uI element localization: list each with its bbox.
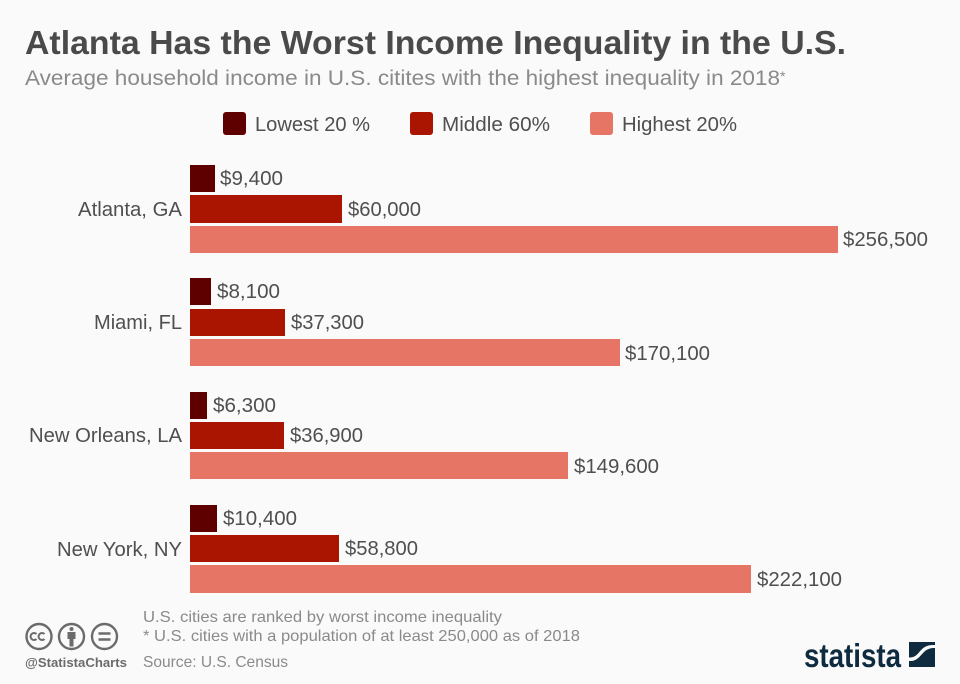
subtitle asterisk: * [780, 68, 786, 84]
group: Miami: $170,100 [625, 343, 710, 365]
group: Miami [94, 278, 710, 366]
group: New Orleans: $149,600 [574, 456, 659, 478]
footnotes: * U.S. cities with a population of at least 250,000 as of 2018 [143, 628, 580, 645]
group: New York: $222,100 [757, 569, 842, 591]
group: New York [57, 505, 842, 593]
subtitle: Average household income in U.S. citites with the highest inequality in 2018 [25, 67, 780, 90]
icon: cc licence [26, 624, 117, 649]
group: Miami: $37,300 [291, 312, 364, 334]
logo: statista: statista [804, 637, 902, 674]
group: Atlanta: $60,000 [348, 199, 421, 221]
group: Miami: $8,100 [217, 281, 280, 303]
group: Atlanta: $256,500 [843, 229, 928, 251]
legend: lowest 20%: Lowest 20 % [255, 114, 370, 136]
group: Atlanta: Atlanta, GA [78, 199, 183, 221]
legend: middle 60% [410, 112, 550, 136]
footnotes: Source: U.S. Census [143, 654, 288, 671]
group: New York: $58,800 [345, 538, 418, 560]
footnotes [143, 609, 580, 671]
group: New Orleans: $36,900 [290, 425, 363, 447]
legend: highest 20%: Highest 20% [622, 114, 737, 136]
group: Atlanta: $9,400 [220, 168, 283, 190]
group: Miami: Miami, FL [94, 312, 182, 334]
title: Atlanta Has the Worst Income Inequality in the U.S. [25, 24, 846, 61]
legend: middle 60%: Middle 60% [442, 114, 550, 136]
handle: @StatistaCharts [25, 656, 127, 670]
footnotes: U.S. cities are ranked by worst income inequality [143, 609, 502, 626]
group: New Orleans: New Orleans, LA [29, 425, 183, 447]
group: Atlanta [78, 165, 928, 253]
group: New York: New York, NY [57, 539, 182, 561]
group: New Orleans: $6,300 [213, 395, 276, 417]
group: New Orleans [29, 392, 659, 479]
legend [223, 112, 737, 136]
group: New York: $10,400 [223, 508, 297, 530]
